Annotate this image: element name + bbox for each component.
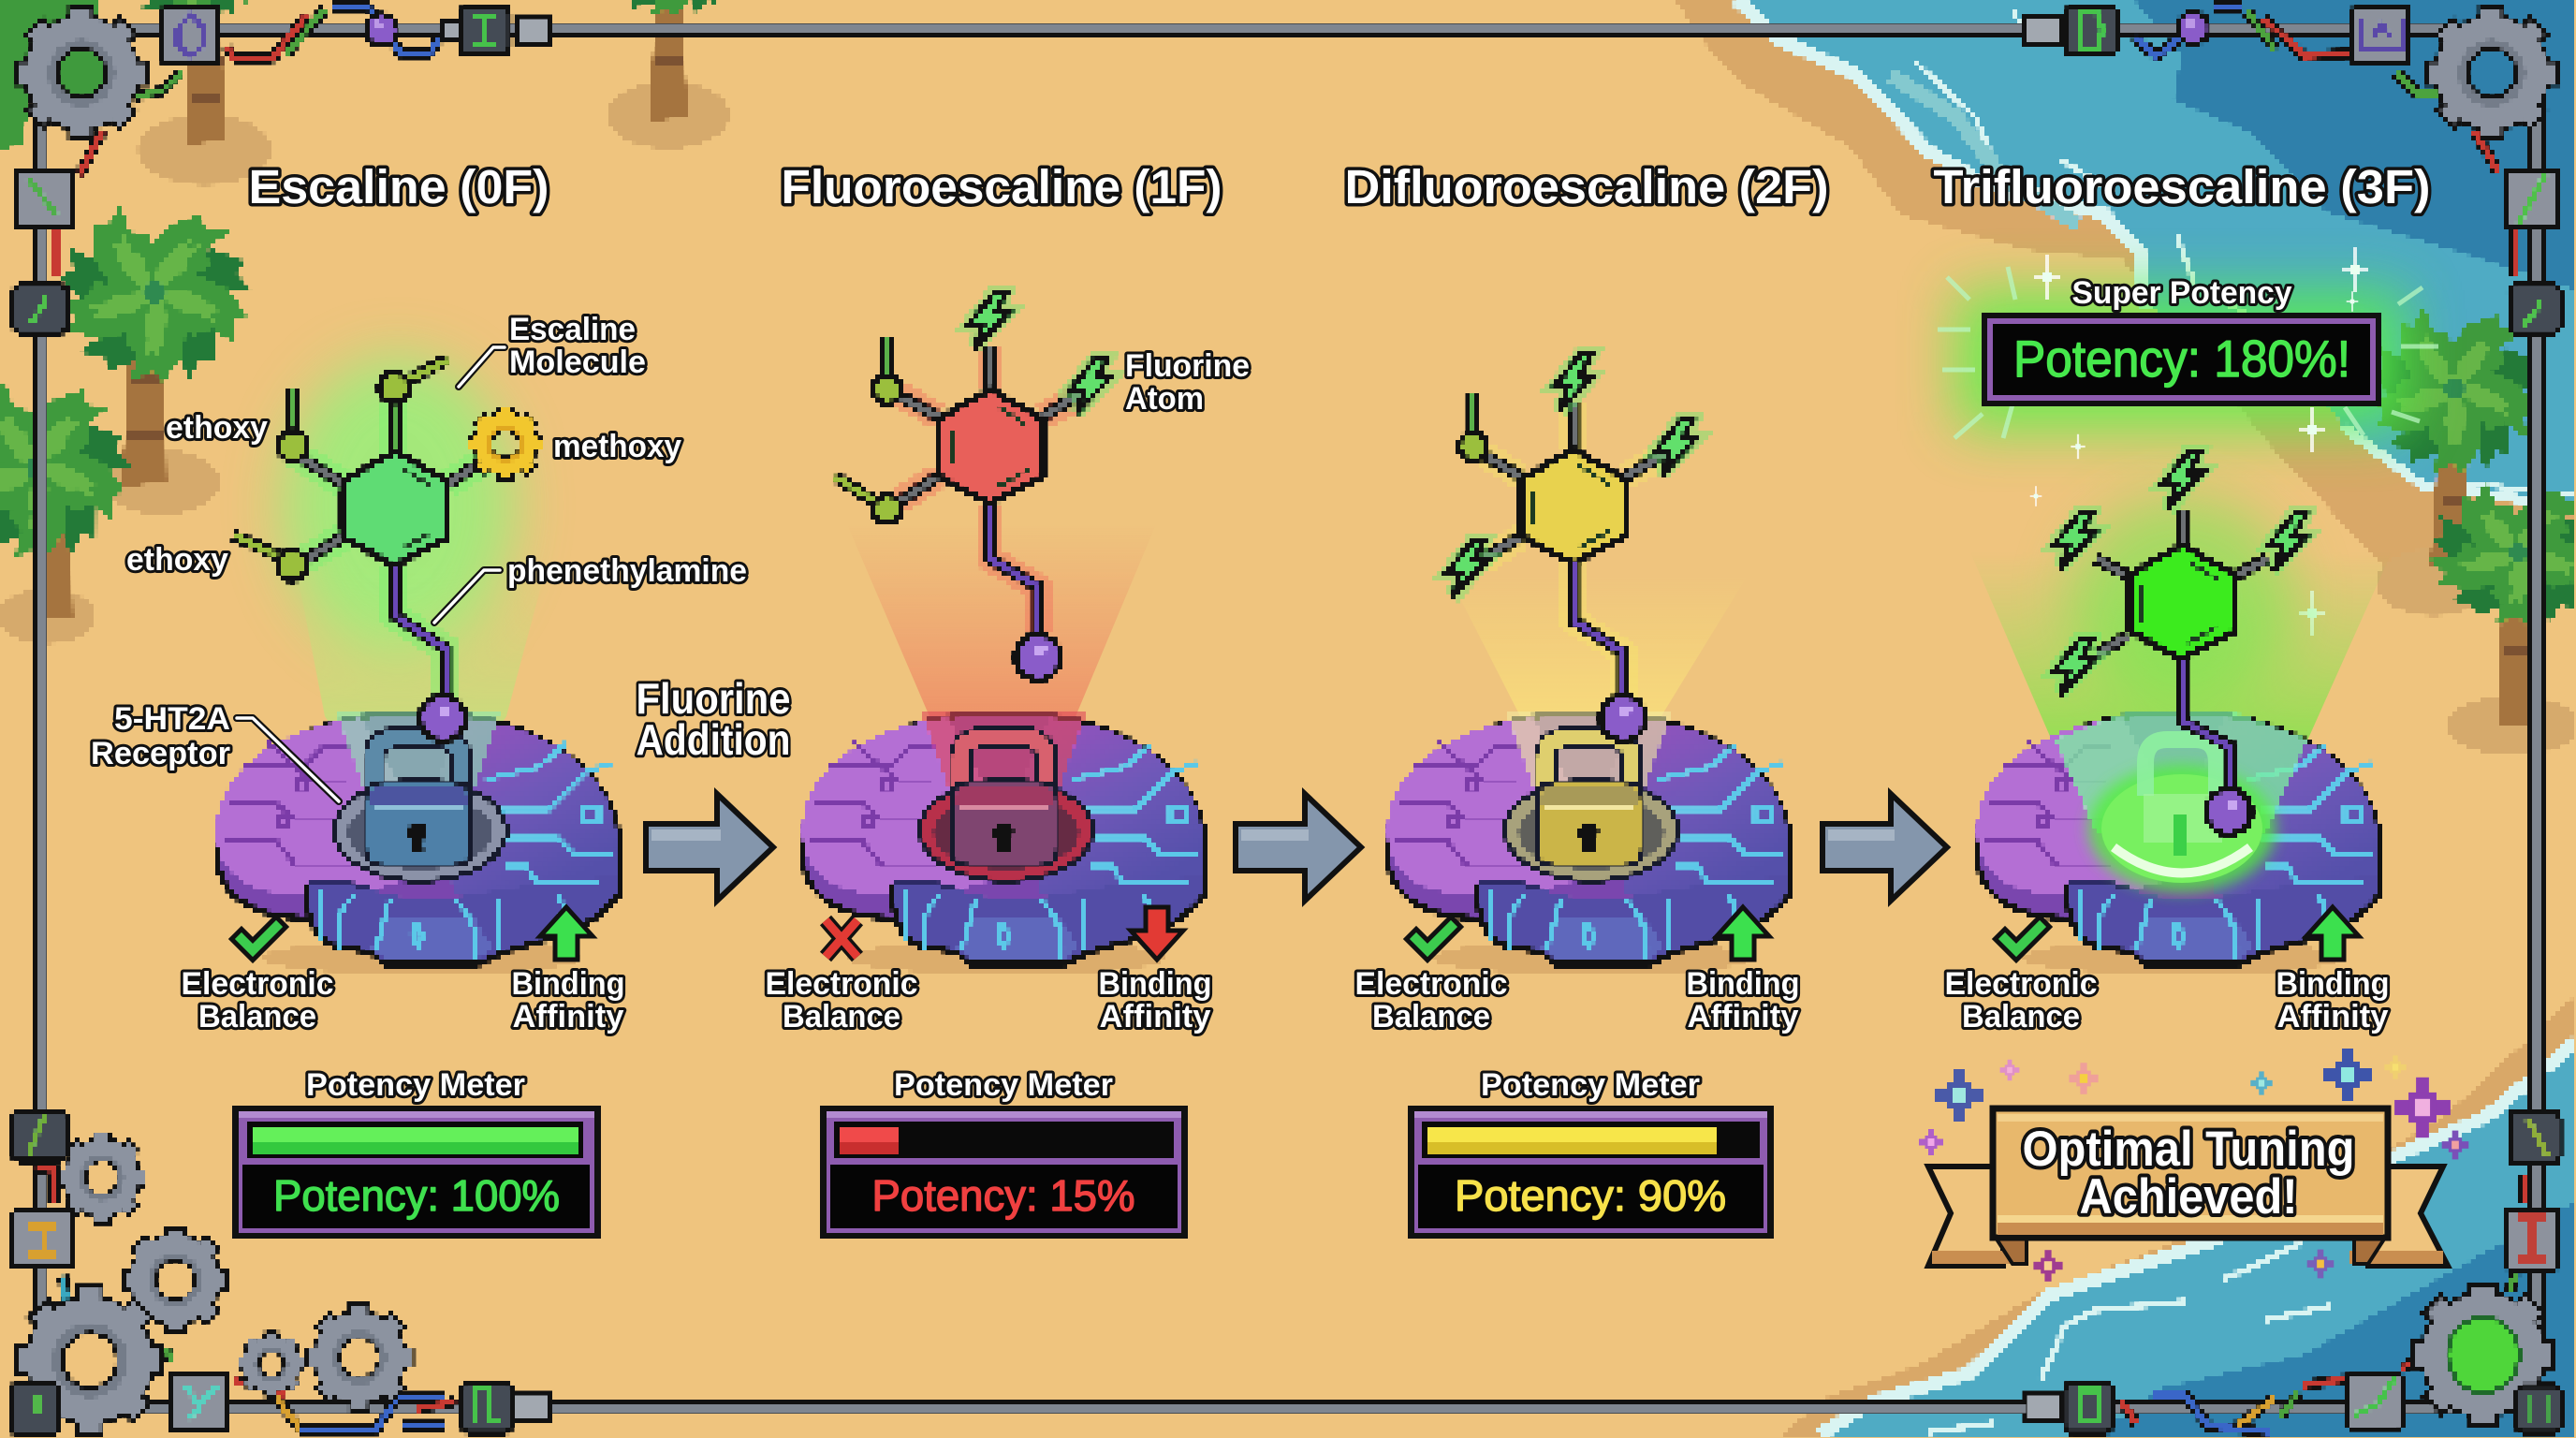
- panel: Difluoroescaline 2F: [1344, 160, 1829, 1239]
- receptor and lock: [1977, 712, 2380, 975]
- label: Fluorine Addition: Addition: [637, 715, 790, 764]
- label: ethoxy upper: ethoxy: [166, 410, 268, 446]
- label: Binding Affinity: Affinity: [2276, 999, 2389, 1034]
- banner: optimal tuning achieved: [1928, 1108, 2448, 1266]
- rail couplers: [442, 17, 2062, 1419]
- glow beam: [1970, 496, 2392, 824]
- beam: [847, 524, 1156, 805]
- super potency badge: [1982, 275, 2381, 406]
- icon: up arrow, binding affinity: [540, 907, 593, 960]
- label: Fluorine Addition: Fluorine: [637, 674, 790, 723]
- label: Electronic Balance: [182, 966, 333, 1034]
- beam: [1446, 571, 1750, 805]
- molecule: [835, 292, 1110, 680]
- title: Fluoroescaline (1F): [781, 160, 1222, 213]
- label: Binding Affinity: Binding: [1687, 966, 1799, 1002]
- label: Escaline Molecule: Escaline: [509, 312, 636, 347]
- label: Binding Affinity: [1099, 966, 1211, 1034]
- label: 5-HT2A Receptor: [91, 701, 339, 801]
- icon: down arrow, binding affinity: [1131, 907, 1183, 960]
- label: Electronic Balance: Balance: [783, 999, 900, 1034]
- label: Electronic Balance: [1945, 966, 2097, 1034]
- potency meter: [820, 1067, 1188, 1239]
- energised lock: [2088, 740, 2276, 892]
- ocean, bottom right: [1816, 1042, 2576, 1438]
- label: Binding Affinity: Affinity: [513, 999, 624, 1034]
- ocean, top right: [1736, 0, 2576, 506]
- molecule: [234, 360, 543, 741]
- icon: check, electronic balance: [242, 927, 276, 950]
- icon: check, electronic balance: [2005, 927, 2040, 950]
- deep water, top right: [2134, 0, 2576, 290]
- potency meter: [232, 1067, 601, 1239]
- super potency badge: Potency: 180%!: [2013, 330, 2350, 388]
- potency meter: Potency: 15%: [872, 1171, 1134, 1220]
- label: Electronic Balance: Balance: [1962, 999, 2080, 1034]
- glow and beam: [281, 356, 548, 805]
- label: Binding Affinity: [511, 966, 625, 1034]
- label: phenethylamine: phenethylamine: [507, 553, 747, 589]
- icon: up arrow, binding affinity: [1717, 907, 1769, 960]
- label: Binding Affinity: Affinity: [1099, 999, 1211, 1034]
- label: Binding Affinity: [1687, 966, 1799, 1034]
- arrow: fluorine addition 1: [646, 794, 773, 901]
- label: Electronic Balance: [766, 966, 917, 1034]
- arrow: step 2: [1236, 794, 1361, 901]
- palm shadows: [0, 81, 2576, 756]
- panel: Trifluoroescaline 3F: [1919, 160, 2468, 1282]
- potency meter: Potency Meter: [894, 1067, 1113, 1103]
- palm trunks: [39, 0, 2535, 726]
- label: Escaline Molecule: Molecule: [509, 345, 646, 380]
- foam, top right: [1736, 0, 2576, 506]
- receptor and lock: [802, 712, 1206, 975]
- label: Electronic Balance: Balance: [1372, 999, 1490, 1034]
- label: Binding Affinity: Binding: [511, 966, 625, 1002]
- confetti sparkles: [1919, 1049, 2468, 1282]
- label: Fluorine Atom: Atom: [1125, 381, 1204, 417]
- title: Difluoroescaline (2F): [1344, 160, 1829, 213]
- label: Electronic Balance: Electronic: [766, 966, 917, 1002]
- receptor and lock: [1387, 712, 1791, 975]
- title: Trifluoroescaline (3F): [1934, 160, 2430, 213]
- super potency glow: [1956, 290, 2406, 431]
- arrow: step 3: [1822, 794, 1947, 901]
- potency meter: Potency Meter: [306, 1067, 525, 1103]
- icon: up arrow, binding affinity: [2306, 907, 2359, 960]
- foam, bottom right: [1821, 1042, 2576, 1434]
- label: phenethylamine: [434, 553, 747, 623]
- molecule: [2055, 452, 2307, 834]
- potency meter: [1408, 1067, 1774, 1239]
- wet sand, top right: [1676, 0, 2576, 599]
- label: 5-HT2A Receptor: Receptor: [91, 736, 230, 771]
- molecule: [1447, 355, 1695, 741]
- label: 5-HT2A Receptor: 5-HT2A: [114, 701, 230, 737]
- potency meter: Potency: 100%: [273, 1171, 560, 1220]
- super potency badge: Super Potency: [2072, 275, 2292, 311]
- banner: optimal tuning achieved: Optimal Tuning: [2022, 1122, 2355, 1177]
- label: Fluorine Addition: [637, 674, 790, 764]
- label: Binding Affinity: Binding: [1099, 966, 1211, 1002]
- label: methoxy: methoxy: [553, 429, 681, 464]
- label: Electronic Balance: Balance: [198, 999, 316, 1034]
- label: Electronic Balance: [1355, 966, 1507, 1034]
- label: Fluorine Atom: Fluorine: [1125, 348, 1250, 384]
- icon: check, electronic balance: [1416, 927, 1451, 950]
- wet sand, bottom right: [1778, 995, 2576, 1438]
- label: Binding Affinity: Binding: [2276, 966, 2389, 1002]
- icon: X, electronic balance: [826, 920, 857, 957]
- deep water, bottom right: [2093, 1201, 2576, 1438]
- potency meter: Potency Meter: [1481, 1067, 1700, 1103]
- potency meter: Potency: 90%: [1455, 1171, 1726, 1220]
- palm fronds: [53, 200, 256, 384]
- panel: Escaline 0F: [91, 160, 747, 1239]
- label: Electronic Balance: Electronic: [1945, 966, 2097, 1002]
- banner: optimal tuning achieved: Achieved!: [2080, 1169, 2297, 1225]
- purple gems: [366, 12, 2209, 46]
- label: Electronic Balance: Electronic: [1355, 966, 1507, 1002]
- label: Fluorine Atom: [1125, 348, 1250, 417]
- receptor and lock: [216, 712, 620, 975]
- sparkle rays: [1938, 247, 2438, 636]
- label: Binding Affinity: Affinity: [1687, 999, 1799, 1034]
- label: ethoxy lower: ethoxy: [126, 542, 228, 578]
- title: Escaline (0F): [249, 160, 549, 213]
- label: Binding Affinity: [2276, 966, 2389, 1034]
- label: Escaline Molecule: [459, 312, 646, 387]
- panel: Fluoroescaline 1F: [766, 160, 1250, 1239]
- label: Electronic Balance: Electronic: [182, 966, 333, 1002]
